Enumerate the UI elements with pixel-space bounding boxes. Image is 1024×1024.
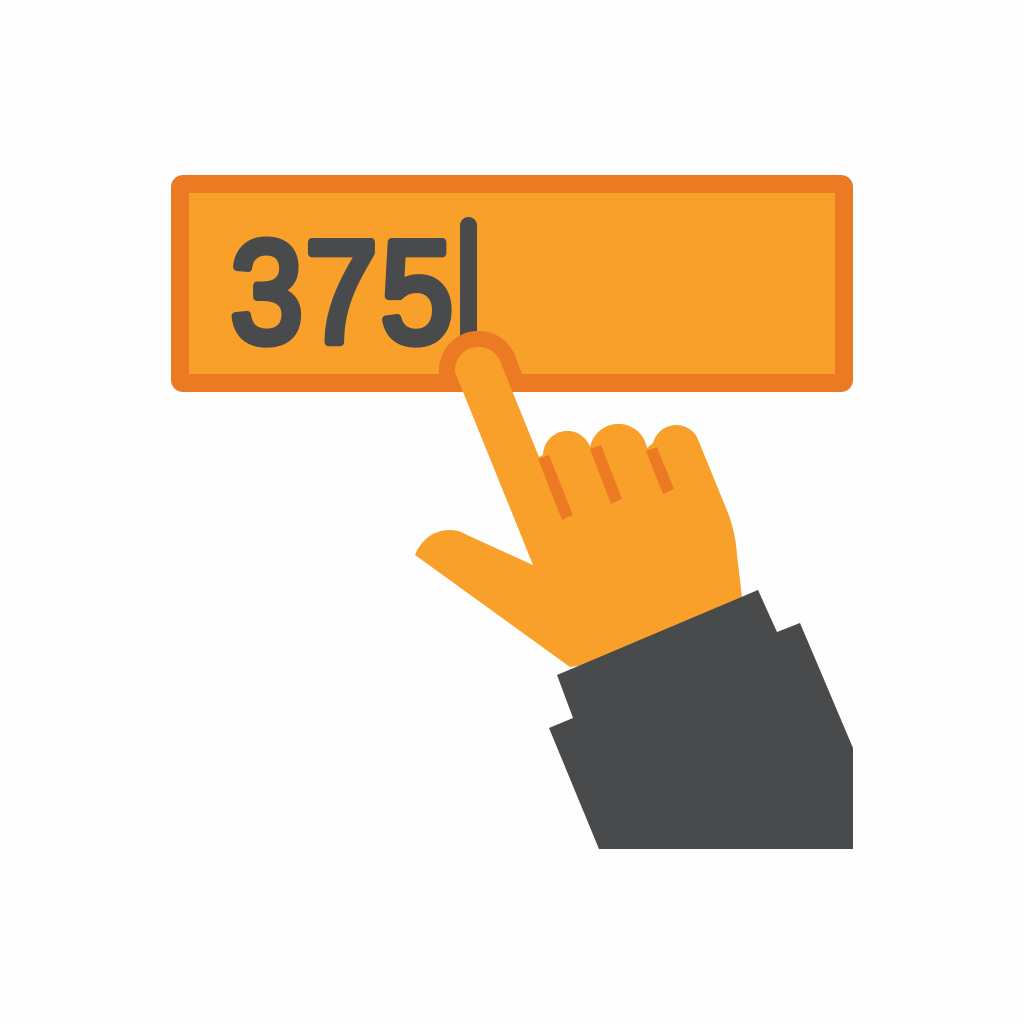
field border and fill xyxy=(180,184,844,383)
typed number: 375 xyxy=(230,212,453,374)
knuckle line 2 xyxy=(590,445,622,504)
text cursor xyxy=(460,217,477,345)
hand pointing at field xyxy=(415,331,853,849)
hand shape xyxy=(415,347,777,667)
input field xyxy=(180,184,844,383)
fingertip outline xyxy=(439,331,529,392)
sleeve cuff xyxy=(549,590,853,849)
knuckle line 1 xyxy=(538,455,573,520)
knuckle line 3 xyxy=(646,447,674,494)
